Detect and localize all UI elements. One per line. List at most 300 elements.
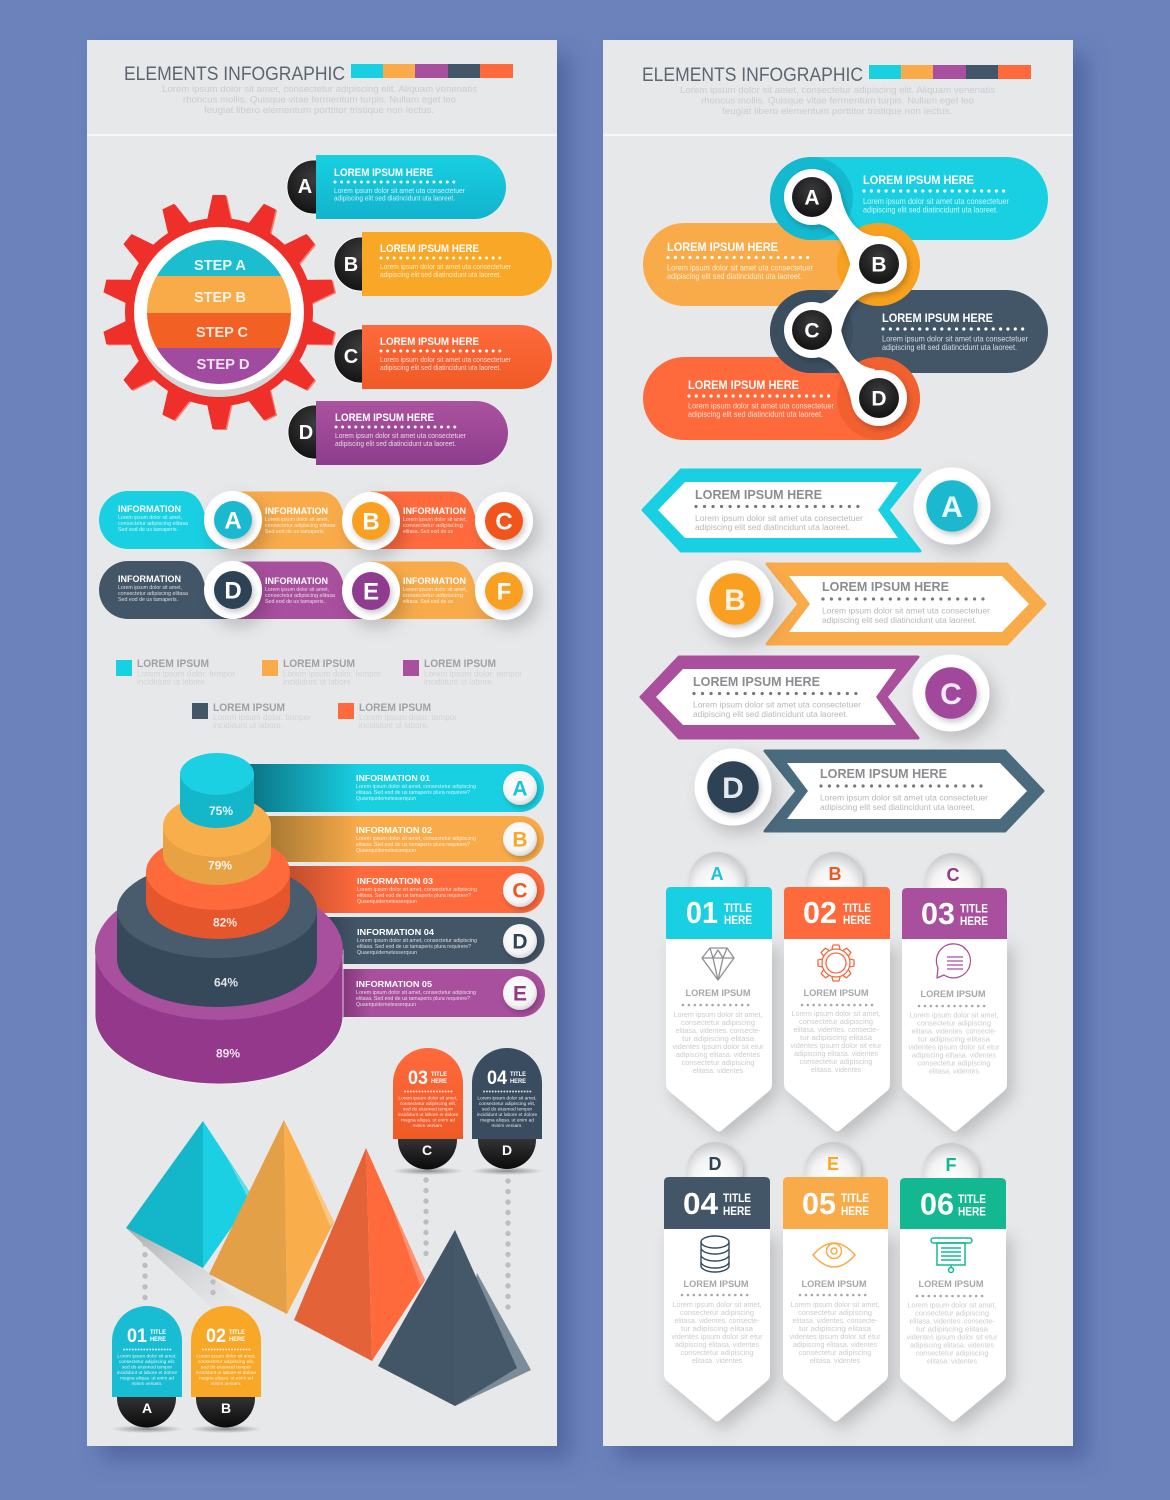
node D: D xyxy=(871,388,887,410)
arrow banner A: Lorem ipsum dolor sit amet uta consectetuer xyxy=(695,513,863,523)
information row 1: Sed eod de us tamaperis. xyxy=(265,529,325,535)
card 04: consectetur adipiscing xyxy=(680,1308,754,1317)
header: right: feugiat libero elementum porttitor tristique non lectus. xyxy=(722,106,952,117)
information row 1: consectetur adipiscing elitasa xyxy=(118,521,189,527)
text A xyxy=(863,173,1009,214)
card 03: elitasa. videntes xyxy=(929,1066,979,1076)
card 03: Lorem ipsum dolor sit amet, xyxy=(910,1010,998,1020)
bar 05: elitasa. Sed eod de us tamaperis plura requirere? xyxy=(356,996,470,1002)
arrow banner D: adipiscing elit sed diatincidunt uta laoreet. xyxy=(820,802,975,812)
card 02: tur adipiscing elitasa xyxy=(800,1033,873,1042)
icon: coin stack xyxy=(701,1236,729,1272)
card 03: elitasa. videntes. consecte- xyxy=(912,1026,997,1036)
tab B xyxy=(334,232,552,296)
arrow banner C: C xyxy=(940,678,962,711)
card 06: F xyxy=(946,1155,956,1175)
card 03: LOREM IPSUM xyxy=(920,989,986,1000)
card 05: Lorem ipsum dolor sit amet, xyxy=(790,1300,880,1309)
information row 2: INFORMATION xyxy=(118,574,181,584)
connector dots xyxy=(145,1180,508,1308)
card 03: HERE xyxy=(960,916,988,928)
gear diagram: STEP A xyxy=(194,257,246,274)
tab B: adipiscing elit sed diatincidunt uta laoreet. xyxy=(380,270,501,279)
bar 03: elitasa. Sed eod de us tamaperis plura requirere? xyxy=(357,893,471,899)
card 02: videntes ipsum dolor sit etur xyxy=(790,1041,882,1050)
header: right: rhoncus mollis. Quisque vitae fermentum turpis. Nullam eget leo xyxy=(701,96,974,106)
tab D: adipiscing elit sed diatincidunt uta laoreet. xyxy=(335,439,456,448)
tab A: adipiscing elit sed diatincidunt uta laoreet. xyxy=(334,194,455,202)
legend: LOREM IPSUM xyxy=(213,702,285,714)
node F: F xyxy=(497,578,511,606)
card 05: elitasa. videntes xyxy=(810,1356,860,1365)
information row 2: Lorem ipsum dolor sit amet, xyxy=(265,587,329,593)
information row 2: Lorem ipsum dolor sit amet, xyxy=(403,587,467,593)
node B xyxy=(859,244,899,284)
callout 03: TITLE xyxy=(431,1071,447,1078)
card 05: consectetur adipiscing xyxy=(798,1348,872,1357)
bar 05: E xyxy=(513,982,527,1006)
arrow banner B xyxy=(696,560,1045,644)
tab B: Lorem ipsum dolor sit amet uta consectetuer xyxy=(380,262,511,271)
bar 03: INFORMATION 03 xyxy=(357,876,433,886)
card 01: consectetur adipiscing xyxy=(681,1018,755,1027)
callout 04 xyxy=(471,1048,543,1175)
card 03: consectetur adipiscing xyxy=(918,1058,990,1068)
legend: LOREM IPSUM xyxy=(283,658,355,670)
information row 2: Sed eod de us tamaperis. xyxy=(265,599,325,605)
icon: gear xyxy=(818,945,854,981)
bar 04 xyxy=(300,917,544,964)
card 01 xyxy=(666,852,772,1132)
tab A: Lorem ipsum dolor sit amet uta consectetuer xyxy=(334,186,465,195)
legend: LOREM IPSUM xyxy=(359,702,431,714)
callout 01: minim veniam. xyxy=(132,1381,162,1387)
card 04: HERE xyxy=(723,1206,751,1218)
node A: A xyxy=(804,186,820,210)
callout 01: TITLE xyxy=(150,1329,166,1336)
bar 04: elitasa. Sed eod de us tamaperis plura requirere? xyxy=(357,944,471,950)
card 03: 03 xyxy=(921,896,955,931)
text D: adipiscing elit sed diatincidunt uta laoreet. xyxy=(688,409,823,419)
layer slate 64%: 64% xyxy=(214,976,238,990)
arrow banner B: B xyxy=(724,584,746,617)
card 06: TITLE xyxy=(958,1194,986,1206)
node E xyxy=(342,562,400,620)
node C: C xyxy=(804,320,820,342)
header: left: ELEMENTS INFOGRAPHIC xyxy=(124,64,345,85)
header: right: ELEMENTS INFOGRAPHIC xyxy=(642,65,863,86)
callout 03: 03 xyxy=(408,1068,428,1089)
callout 02: TITLE xyxy=(229,1329,245,1336)
callout 03: incididunt ut labore et dolore xyxy=(398,1112,458,1118)
card 05: TITLE xyxy=(841,1193,869,1205)
card 05 xyxy=(783,1142,888,1422)
bar 03: Lorem ipsum dolor sit amet, consectetur adipiscing xyxy=(357,887,477,893)
bar 02: Lorem ipsum dolor sit amet, consectetur adipiscing xyxy=(356,836,476,842)
arrow banner C: LOREM IPSUM HERE xyxy=(693,674,820,689)
card 06: adipiscing elitasa. videntes xyxy=(910,1340,994,1350)
node E: E xyxy=(363,578,379,606)
pyramid shadow xyxy=(126,1228,252,1312)
layer slate 64% xyxy=(117,862,317,1007)
callout 04: consectetur adipiscing elit, xyxy=(479,1101,535,1107)
node A xyxy=(204,491,262,549)
callout 02: 02 xyxy=(206,1326,226,1347)
card 04: elitasa. videntes. consecte- xyxy=(674,1316,760,1325)
card 04: videntes ipsum dolor sit etur xyxy=(672,1332,763,1341)
tab B: B xyxy=(344,254,358,276)
information row 2: Lorem ipsum dolor sit amet, xyxy=(118,585,182,591)
card 04: LOREM IPSUM xyxy=(684,1279,749,1290)
information row 2: consectetur adipiscing xyxy=(403,593,463,599)
bar 01 xyxy=(240,764,544,812)
information row 1: Lorem ipsum dolor sit amet, xyxy=(265,517,329,523)
card 01: 01 xyxy=(686,895,718,930)
callout 03: consectetur adipiscing elit, xyxy=(400,1101,456,1107)
card 06: consectetur adipiscing xyxy=(915,1308,989,1318)
callout 04: sed do eiusmod tempor xyxy=(482,1106,532,1112)
tab A: LOREM IPSUM HERE xyxy=(334,167,433,179)
card 01: adipiscing elitasa. videntes xyxy=(676,1050,760,1059)
information bars xyxy=(240,764,545,1017)
header: left: feugiat libero elementum porttitor tristique non lectus. xyxy=(204,105,434,116)
callout 04: 04 xyxy=(487,1068,507,1089)
linked pills diagram xyxy=(643,157,1048,440)
card 01: LOREM IPSUM xyxy=(686,988,751,999)
information row 2: consectetur adipiscing elitasa xyxy=(265,593,336,599)
callout 03: sed do eiusmod tempor xyxy=(403,1106,453,1112)
header: left xyxy=(124,64,513,116)
bar 02: elitasa. Sed eod de us tamaperis plura requirere? xyxy=(356,842,470,848)
card 05: tur adipiscing elitasa xyxy=(799,1324,872,1333)
bar 01: Lorem ipsum dolor sit amet, consectetur adipiscing xyxy=(356,784,476,790)
bar 04: Quaerquidemetesserquun xyxy=(357,950,417,956)
card 03: videntes ipsum dolor sit etur xyxy=(908,1042,1000,1052)
card 04: TITLE xyxy=(723,1193,751,1205)
header: left: Lorem ipsum dolor sit amet, consectetur adipiscing elit. Aliquam venenatis xyxy=(162,84,477,95)
callout 03 xyxy=(392,1048,464,1175)
layer orange-red 82%: 82% xyxy=(213,916,237,930)
text B: LOREM IPSUM HERE xyxy=(667,240,778,254)
callout 04: magna aliqua. ut enim ad xyxy=(480,1118,534,1124)
callout 01: HERE xyxy=(150,1336,166,1343)
tab C xyxy=(334,325,552,389)
legend: Lorem ipsum dolor. tempor xyxy=(137,670,235,678)
callout 03: magna aliqua. ut enim ad xyxy=(401,1118,455,1124)
card 02: HERE xyxy=(843,915,871,927)
card 01: videntes ipsum dolor sit etur xyxy=(672,1042,764,1051)
header: left: rhoncus mollis. Quisque vitae fermentum turpis. Nullam eget leo xyxy=(183,94,456,106)
arrow banner A: adipiscing elit sed diatincidunt uta laoreet. xyxy=(695,522,850,532)
card 06: HERE xyxy=(958,1206,986,1218)
callout 04: TITLE xyxy=(510,1071,526,1078)
card 04: adipiscing elitasa. videntes xyxy=(675,1340,759,1349)
card 06: elitasa. videntes xyxy=(927,1356,977,1366)
arrow banner C: adipiscing elit sed diatincidunt uta laoreet. xyxy=(693,709,848,719)
node F xyxy=(475,562,533,620)
arrow banner B: Lorem ipsum dolor sit amet uta consectetuer xyxy=(822,606,990,616)
callout 02: Lorem ipsum dolor sit amet, xyxy=(196,1354,256,1360)
tab A: A xyxy=(298,176,312,198)
card 05: consectetur adipiscing xyxy=(798,1308,872,1317)
card 04: 04 xyxy=(683,1186,719,1221)
card 06: consectetur adipiscing xyxy=(916,1348,988,1358)
arrow banner A xyxy=(643,468,990,551)
card 01: tur adipiscing elitasa xyxy=(682,1034,755,1043)
card 01: TITLE xyxy=(724,903,752,915)
card 03: adipiscing elitasa. videntes xyxy=(912,1050,996,1060)
gear diagram xyxy=(102,195,337,430)
information row 1: INFORMATION xyxy=(265,506,328,516)
callout 04: minim veniam. xyxy=(492,1123,522,1129)
icon: projector screen xyxy=(931,1238,972,1272)
legend: incididunt ut labore. xyxy=(213,721,283,730)
text D: Lorem ipsum dolor sit amet uta consectetuer xyxy=(688,400,834,410)
pyramids xyxy=(126,1120,531,1406)
card 02: adipiscing elitasa. videntes xyxy=(794,1049,878,1058)
legend: incididunt ut labore. xyxy=(137,678,207,686)
callout 01: Lorem ipsum dolor sit amet, xyxy=(117,1354,177,1360)
pyramid orange xyxy=(209,1120,334,1314)
text C: adipiscing elit sed diatincidunt uta laoreet. xyxy=(882,342,1017,352)
text B xyxy=(667,240,813,281)
bar 02: Quaerquidemetesserquun xyxy=(356,848,416,854)
tab C: Lorem ipsum dolor sit amet uta consectetuer xyxy=(380,355,511,364)
card 02 xyxy=(784,852,890,1132)
tab C: C xyxy=(344,346,358,368)
node B xyxy=(342,492,400,550)
card 02: TITLE xyxy=(843,903,871,915)
card 06: tur adipiscing elitasa xyxy=(916,1324,989,1334)
callout 03: Lorem ipsum dolor sit amet, xyxy=(398,1096,458,1102)
card 01: elitasa. videntes. consecte- xyxy=(676,1026,761,1035)
arrow banner C: Lorem ipsum dolor sit amet uta consectetuer xyxy=(693,700,861,710)
card 02: elitasa. videntes. consecte- xyxy=(794,1025,879,1034)
arrow banner C xyxy=(641,654,990,738)
callout 01: sed do eiusmod tempor xyxy=(122,1364,172,1370)
bar 04: D xyxy=(512,930,528,954)
arrow banner A: LOREM IPSUM HERE xyxy=(695,487,822,502)
callout 01: A xyxy=(142,1400,152,1416)
card 02: LOREM IPSUM xyxy=(804,988,869,999)
card 05: E xyxy=(827,1154,839,1174)
bar 05: Lorem ipsum dolor sit amet, consectetur adipiscing xyxy=(356,990,476,996)
bar 03 xyxy=(280,866,544,913)
legend: incididunt ut labore. xyxy=(283,678,353,686)
card 06: videntes ipsum dolor sit etur xyxy=(906,1332,998,1342)
text B: adipiscing elit sed diatincidunt uta laoreet. xyxy=(667,271,802,281)
card 03: tur adipiscing elitasa xyxy=(918,1034,991,1044)
callout 02: B xyxy=(221,1400,231,1416)
legend: LOREM IPSUM xyxy=(424,658,496,670)
node C xyxy=(792,310,832,350)
pyramid slate xyxy=(378,1230,531,1406)
arrow banner D: D xyxy=(722,772,744,805)
tab C: adipiscing elit sed diatincidunt uta laoreet. xyxy=(380,363,501,372)
card 02: elitasa. videntes xyxy=(811,1065,861,1074)
card 06: Lorem ipsum dolor sit amet, xyxy=(908,1300,996,1310)
tab D: LOREM IPSUM HERE xyxy=(335,412,434,424)
callout 01: consectetur adipiscing elit, xyxy=(119,1359,175,1365)
icon: eye xyxy=(813,1243,855,1267)
callout 03: HERE xyxy=(431,1078,447,1085)
bar 02 xyxy=(260,816,544,862)
card 02: consectetur adipiscing xyxy=(799,1017,873,1026)
pyramid red xyxy=(294,1148,425,1361)
bar 05: INFORMATION 05 xyxy=(356,979,432,989)
callout 02: sed do eiusmod tempor xyxy=(201,1364,251,1370)
pyramid cyan xyxy=(126,1121,253,1268)
information row 1: Lorem ipsum dolor sit amet, xyxy=(118,515,182,521)
callout 01: magna aliqua. ut enim ad xyxy=(120,1376,174,1382)
information row 2 xyxy=(99,561,533,620)
card 02: 02 xyxy=(803,895,837,930)
card 01: A xyxy=(710,864,724,884)
icon: diamond xyxy=(702,948,734,980)
card 02: B xyxy=(828,864,842,884)
stacked cylinder chart xyxy=(95,753,343,1084)
text D: LOREM IPSUM HERE xyxy=(688,378,799,392)
information row 1: INFORMATION xyxy=(403,506,466,516)
panel: right sheet xyxy=(603,40,1073,1446)
arrow banner D xyxy=(694,748,1043,831)
card 05: LOREM IPSUM xyxy=(802,1279,867,1290)
callout 02: magna aliqua. ut enim ad xyxy=(199,1376,253,1382)
legend: Lorem ipsum dolor. tempor xyxy=(424,670,522,678)
bar 01: A xyxy=(512,778,528,800)
card 05: HERE xyxy=(841,1206,869,1218)
tab D xyxy=(288,401,508,465)
legend: LOREM IPSUM xyxy=(137,658,209,670)
card 04 xyxy=(664,1142,770,1422)
card 06: LOREM IPSUM xyxy=(918,1279,984,1290)
layer purple 89%: 89% xyxy=(216,1046,240,1060)
text A: Lorem ipsum dolor sit amet uta consectetuer xyxy=(863,196,1009,206)
layer cyan 75% xyxy=(180,753,254,828)
callout 04: HERE xyxy=(510,1078,526,1085)
bar 02: B xyxy=(512,828,528,852)
legend: incididunt ut labore. xyxy=(359,721,429,730)
tab B: LOREM IPSUM HERE xyxy=(380,243,479,255)
card 03: C xyxy=(946,865,960,885)
text C: Lorem ipsum dolor sit amet uta consectetuer xyxy=(882,334,1028,344)
callout 01 xyxy=(111,1306,183,1433)
information row 1: consectetur adipiscing elitasa xyxy=(265,523,336,529)
header: right xyxy=(642,65,1031,117)
arrow banner D: Lorem ipsum dolor sit amet uta consectetuer xyxy=(820,792,988,802)
gear diagram: STEP D xyxy=(196,356,250,373)
legend: Lorem ipsum dolor. tempor xyxy=(359,713,457,722)
text A: LOREM IPSUM HERE xyxy=(863,173,974,187)
icon: speech bubble xyxy=(936,944,970,978)
white connector xyxy=(784,169,907,426)
card 04: tur adipiscing elitasa xyxy=(681,1324,754,1333)
bar 02: INFORMATION 02 xyxy=(356,825,432,835)
card 03 xyxy=(902,853,1007,1132)
bar 01: INFORMATION 01 xyxy=(356,773,430,783)
card 02: Lorem ipsum dolor sit amet, xyxy=(792,1009,880,1018)
card 05: videntes ipsum dolor sit etur xyxy=(790,1332,881,1341)
bar 05 xyxy=(320,969,545,1017)
callout 02 xyxy=(190,1306,262,1433)
legend: incididunt ut labore. xyxy=(424,678,494,686)
arrow banner D: LOREM IPSUM HERE xyxy=(820,766,947,781)
node D xyxy=(204,561,262,619)
panel: left sheet xyxy=(87,40,557,1446)
layer orange 79% xyxy=(163,795,271,885)
card 03: consectetur adipiscing xyxy=(917,1018,991,1028)
tab D: D xyxy=(299,422,313,444)
card 01: HERE xyxy=(724,915,752,927)
card 06: elitasa. videntes. consecte- xyxy=(910,1316,995,1326)
card 03: TITLE xyxy=(960,904,988,916)
information row 1 xyxy=(99,491,533,550)
text A: adipiscing elit sed diatincidunt uta laoreet. xyxy=(863,204,998,214)
layer orange-red 82% xyxy=(146,834,290,939)
callout 04: incididunt ut labore et dolore xyxy=(477,1112,537,1118)
information row 2: consectetur adipiscing elitasa xyxy=(118,591,189,597)
gear diagram: STEP B xyxy=(194,289,246,306)
callout 02: incididunt ut labore et dolore xyxy=(196,1370,256,1376)
information row 2: elitasa. Sed eod de us xyxy=(403,599,453,605)
callout 02: HERE xyxy=(229,1336,245,1343)
callout 04: D xyxy=(502,1142,512,1158)
card 04: consectetur adipiscing xyxy=(680,1348,754,1357)
layer orange 79%: 79% xyxy=(208,858,232,872)
legend: Lorem ipsum dolor. tempor xyxy=(283,670,381,678)
node A: A xyxy=(224,508,242,534)
card 04: Lorem ipsum dolor sit amet, xyxy=(672,1300,762,1309)
card 01: Lorem ipsum dolor sit amet, xyxy=(674,1010,762,1019)
card 05: elitasa. videntes. consecte- xyxy=(792,1316,878,1325)
tab A xyxy=(287,155,506,219)
information row 1: elitasa. Sed eod de us xyxy=(403,529,453,535)
tab C: LOREM IPSUM HERE xyxy=(380,336,479,348)
card 01: consectetur adipiscing xyxy=(682,1058,754,1067)
card 05: adipiscing elitasa. videntes xyxy=(793,1340,877,1349)
node C: C xyxy=(495,508,513,536)
callout 03: minim veniam. xyxy=(413,1123,443,1129)
text C xyxy=(882,311,1028,352)
legend xyxy=(116,658,522,730)
node D: D xyxy=(224,578,242,604)
information row 1: consectetur adipiscing xyxy=(403,523,463,529)
node B: B xyxy=(871,254,887,276)
callout 01: 01 xyxy=(127,1326,147,1347)
node B: B xyxy=(362,508,380,536)
text D xyxy=(688,378,834,419)
arrow banner B: adipiscing elit sed diatincidunt uta laoreet. xyxy=(822,615,977,625)
callout 04: Lorem ipsum dolor sit amet, xyxy=(477,1096,537,1102)
legend: Lorem ipsum dolor. tempor xyxy=(213,713,311,722)
card 04: elitasa. videntes xyxy=(692,1356,742,1365)
layer purple 89% xyxy=(95,880,343,1084)
bar 01: elitasa. Sed eod de us tamaperis plura requirere? xyxy=(356,790,470,796)
bar 03: Quaerquidemetesserquun xyxy=(357,899,417,905)
information row 1: INFORMATION xyxy=(118,504,181,514)
information row 2: INFORMATION xyxy=(403,576,466,586)
layer cyan 75%: 75% xyxy=(209,804,233,818)
bar 01: Quaerquidemetesserquun xyxy=(356,796,416,802)
callout 01: incididunt ut labore et dolore xyxy=(117,1370,177,1376)
card 05: 05 xyxy=(802,1186,836,1221)
header: right: Lorem ipsum dolor sit amet, consectetur adipiscing elit. Aliquam venenatis xyxy=(680,85,995,96)
tab D: Lorem ipsum dolor sit amet uta consectetuer xyxy=(335,431,466,440)
gear diagram: STEP C xyxy=(196,324,248,341)
card 06 xyxy=(900,1143,1006,1422)
node C xyxy=(475,492,533,550)
text B: Lorem ipsum dolor sit amet uta consectetuer xyxy=(667,262,813,272)
